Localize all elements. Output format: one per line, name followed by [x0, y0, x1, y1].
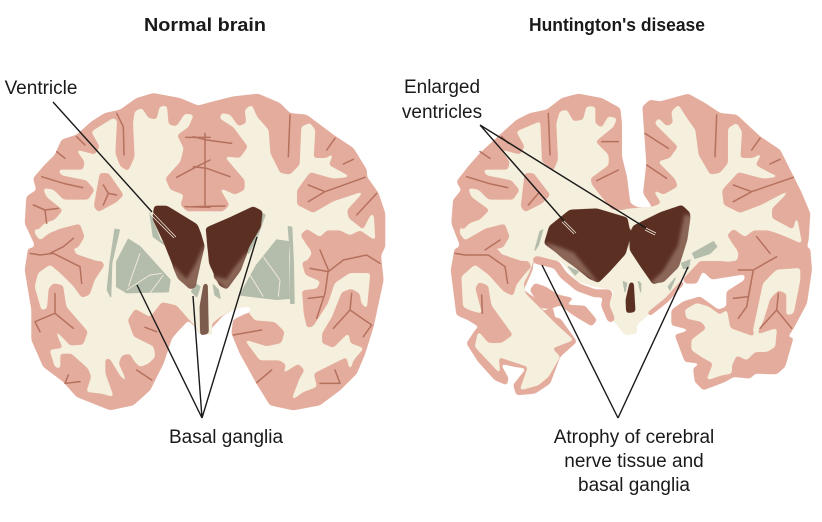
enlarged ventricles	[545, 206, 690, 313]
normal brain illustration	[25, 93, 385, 410]
label: atrophy: Atrophy of cerebral	[554, 427, 714, 448]
sulci	[455, 113, 793, 328]
basal ganglia	[107, 212, 294, 303]
white matter	[460, 105, 802, 390]
huntington brain illustration	[451, 94, 812, 395]
white matter	[33, 105, 375, 400]
label: basal ganglia: Basal ganglia	[169, 427, 283, 448]
title: Huntington's disease: Huntington's disease	[529, 14, 705, 35]
ventricles	[153, 207, 262, 335]
label: enlarged ventricles: Enlarged	[404, 77, 480, 98]
atrophied tissue strip and island	[521, 173, 682, 326]
callout lines	[53, 102, 688, 418]
label: atrophy: basal ganglia	[578, 475, 690, 496]
title: normal brain: Normal brain	[144, 14, 266, 35]
label: ventricle: Ventricle	[5, 78, 77, 99]
cortex silhouette	[25, 93, 385, 410]
insular island	[94, 173, 123, 212]
basal ganglia remnants	[535, 230, 717, 292]
label: enlarged ventricles: ventricles	[402, 102, 482, 123]
cortex silhouette	[451, 94, 812, 395]
label: atrophy: nerve tissue and	[564, 451, 704, 472]
sulci	[30, 113, 380, 383]
